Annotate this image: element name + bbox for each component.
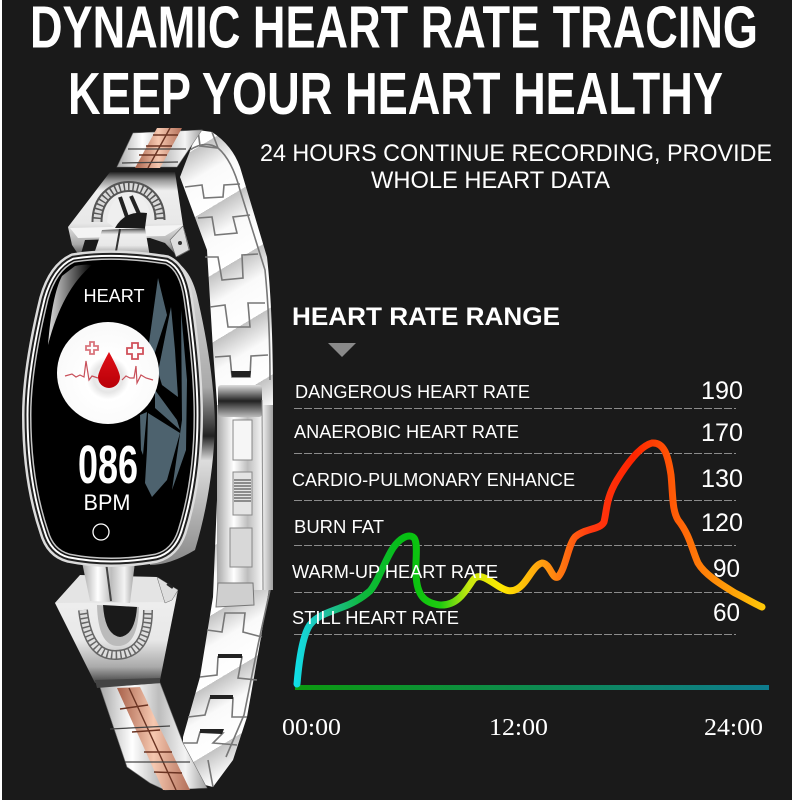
watch screen <box>33 261 192 556</box>
strap clasp <box>216 385 273 607</box>
bottom band with rose gold stripe <box>100 683 207 790</box>
row: burn fat: 120 <box>701 509 743 537</box>
title <box>30 0 758 127</box>
illustration: smartwatch <box>33 128 273 790</box>
row: dangerous heart rate: 190 <box>701 377 743 405</box>
heart rate reading: 086 <box>78 435 138 495</box>
subtitle <box>260 140 772 194</box>
screen label: HEART: HEART <box>84 286 144 306</box>
time axis labels: 12:00 <box>489 715 548 741</box>
row: dangerous heart rate <box>295 377 743 405</box>
top connector <box>93 228 150 257</box>
home button <box>93 524 109 540</box>
right strap <box>180 130 273 787</box>
row: cardio-pulmonary enhance <box>292 465 743 493</box>
row: warm-up heart rate: 90 <box>713 555 740 583</box>
row: burn fat: BURN FAT <box>294 517 384 537</box>
screen label: BPM: BPM <box>84 490 130 515</box>
row: still heart rate: 60 <box>713 599 740 627</box>
heading: heart rate range: HEART RATE RANGE <box>292 303 560 331</box>
screen reflection <box>140 278 187 497</box>
time axis labels: 24:00 <box>704 715 763 741</box>
watch bezel <box>33 261 192 556</box>
chart: heart rate range over 24 hours <box>282 377 769 741</box>
time axis labels <box>282 715 763 741</box>
bottom connector <box>82 562 135 603</box>
row: cardio-pulmonary enhance: CARDIO-PULMONARY ENHANCE <box>292 470 575 490</box>
row: dangerous heart rate: DANGEROUS HEART RATE <box>295 382 530 402</box>
time axis labels: 00:00 <box>282 715 341 741</box>
row: anaerobic heart rate: ANAEROBIC HEART RATE <box>294 422 519 442</box>
row: cardio-pulmonary enhance: 130 <box>701 465 743 493</box>
screen gloss <box>48 265 92 345</box>
row: anaerobic heart rate: 170 <box>701 419 743 447</box>
heart icon disc <box>57 322 159 424</box>
subtitle: 24 HOURS CONTINUE RECORDING, PROVIDE <box>260 140 772 167</box>
heart rate curve <box>297 443 762 684</box>
row: still heart rate: STILL HEART RATE <box>292 608 459 628</box>
row: burn fat <box>294 509 743 537</box>
top lug with rhinestone arch <box>68 172 190 257</box>
top band with rose gold stripe <box>117 128 202 168</box>
row: warm-up heart rate: WARM-UP HEART RATE <box>292 562 498 582</box>
bottom lug with rhinestone horseshoe <box>55 575 178 688</box>
right side of watch case <box>120 258 215 565</box>
baseline <box>295 685 769 690</box>
row: anaerobic heart rate <box>294 419 743 447</box>
row: warm-up heart rate <box>292 555 740 583</box>
subtitle: WHOLE HEART DATA <box>371 167 610 194</box>
icon: down arrow <box>328 343 356 357</box>
row: still heart rate <box>292 599 740 628</box>
